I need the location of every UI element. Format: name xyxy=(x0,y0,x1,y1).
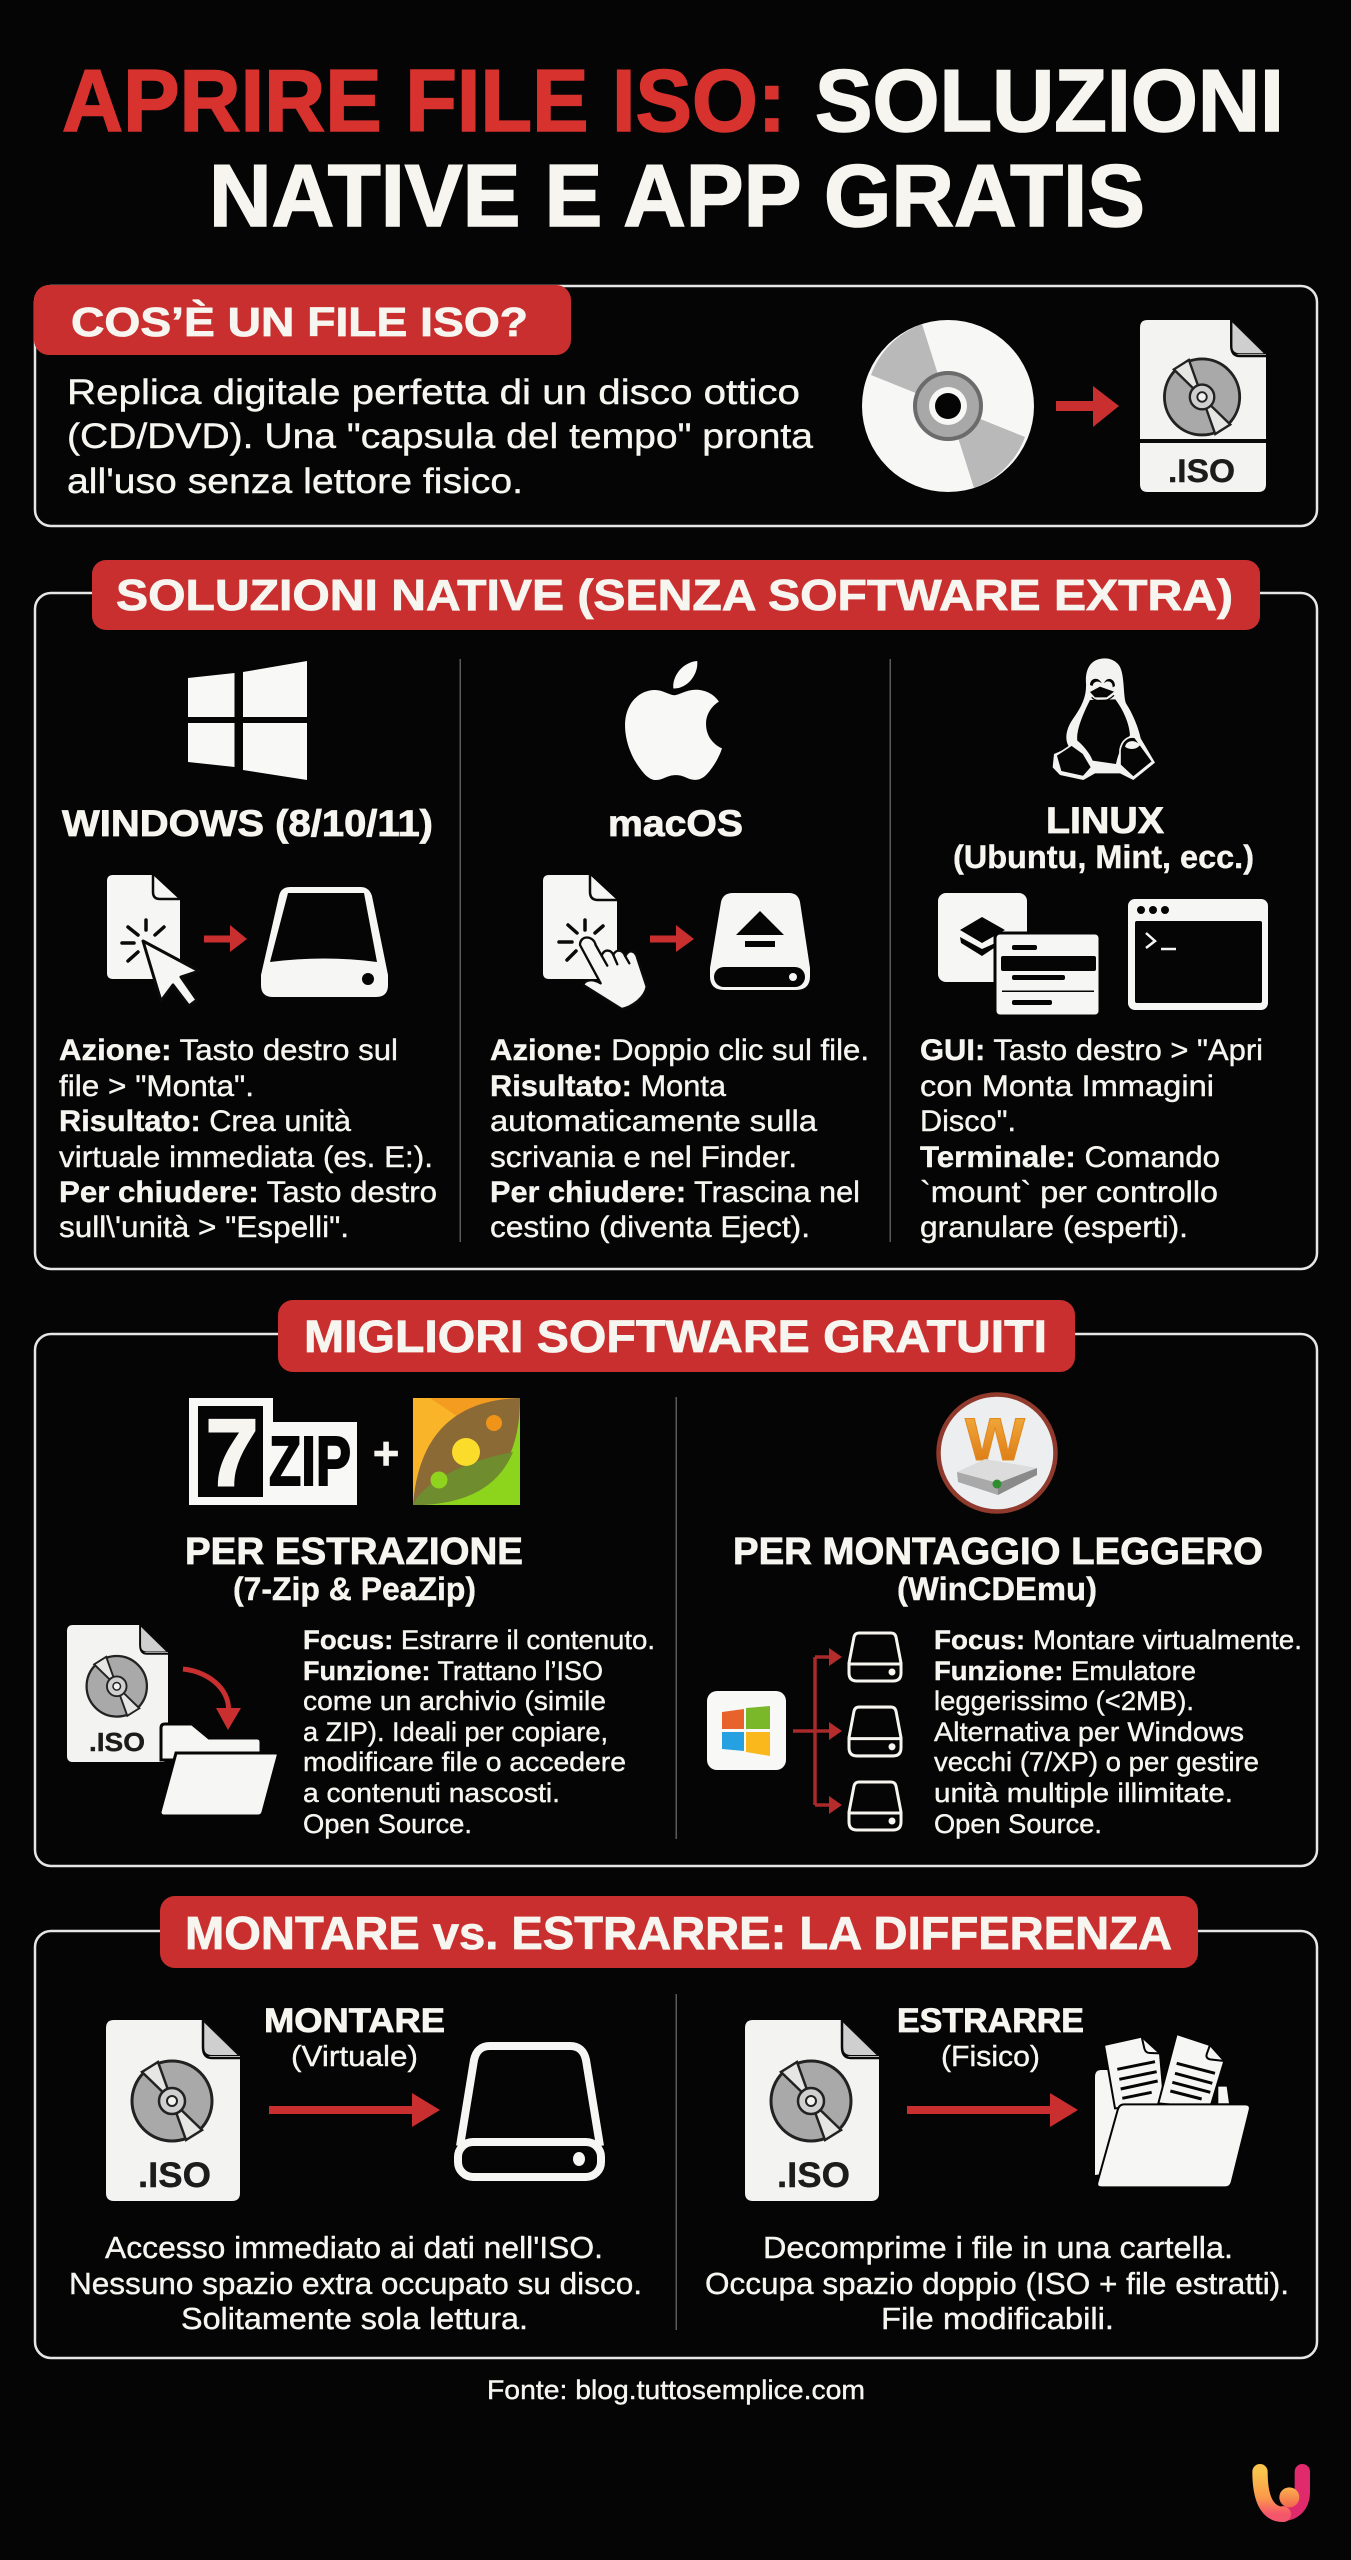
text: linux steps xyxy=(920,1034,1263,1244)
text: macOS steps: automaticamente sulla xyxy=(490,1105,817,1138)
title: SOLUZIONI xyxy=(815,51,1284,150)
text: linux steps: con Monta Immagini xyxy=(920,1070,1214,1103)
column: per montaggio leggero xyxy=(707,1394,1302,1839)
icon: drive outline xyxy=(458,2046,601,2177)
text: estrazione description: modificare file o accedere xyxy=(303,1747,626,1777)
text: estrarre description: Decomprime i file in una cartella. xyxy=(763,2230,1233,2265)
heading: per estrazione: PER ESTRAZIONE xyxy=(185,1531,523,1573)
icon: ISO file: .ISO xyxy=(1168,453,1235,489)
arrow: disc to file xyxy=(1056,386,1119,427)
source credit: Fonte: blog.tuttosemplice.com xyxy=(487,2375,865,2405)
text: macOS steps: Azione: Doppio clic sul file. xyxy=(490,1034,869,1067)
heading: montare xyxy=(264,2002,445,2073)
heading: per montaggio leggero: PER MONTAGGIO LEGGERO xyxy=(733,1531,1263,1573)
text: windows steps: sull\'unità > "Espelli". xyxy=(59,1211,349,1244)
text: estrazione description: a ZIP). Ideali per copiare, xyxy=(303,1717,608,1747)
text: estrarre description xyxy=(705,2230,1289,2336)
text: montaggio description: Funzione: Emulatore xyxy=(934,1656,1196,1686)
panel: montare vs estrarre xyxy=(35,1896,1317,2358)
icon: tux penguin xyxy=(1053,658,1155,780)
icon: ISO file xyxy=(106,2020,240,2201)
panel: migliori software gratuiti xyxy=(35,1300,1317,1866)
text: windows steps: virtuale immediata (es. E:). xyxy=(59,1141,433,1174)
text: estrarre description: File modificabili. xyxy=(881,2301,1114,2336)
column: macOS xyxy=(490,661,869,1244)
icon: windows tile with multiple drives xyxy=(707,1633,901,1830)
heading: migliori software gratuiti: MIGLIORI SOFTWARE GRATUITI xyxy=(304,1311,1047,1362)
text: windows steps: Per chiudere: Tasto destro xyxy=(59,1176,437,1209)
heading: per estrazione xyxy=(185,1531,523,1607)
text: linux steps: `mount` per controllo xyxy=(920,1176,1218,1209)
heading: macOS: macOS xyxy=(608,803,743,844)
text: montaggio description: vecchi (7/XP) o per gestire xyxy=(934,1747,1259,1777)
text: windows steps xyxy=(59,1034,437,1244)
icon: ISO file extracting to folder: .ISO xyxy=(89,1727,145,1757)
title: NATIVE E APP GRATIS xyxy=(209,146,1145,245)
text: montaggio description: Alternativa per Windows xyxy=(934,1717,1244,1747)
text: macOS steps: Risultato: Monta xyxy=(490,1070,726,1103)
title: APRIRE FILE ISO: xyxy=(62,51,786,150)
panel: soluzioni native xyxy=(35,560,1317,1269)
text: montaggio description xyxy=(934,1625,1302,1839)
text: estrazione description: come un archivio (simile xyxy=(303,1686,606,1716)
column: estrarre xyxy=(705,2002,1289,2336)
text: definition xyxy=(67,373,814,501)
icon: gui disk image window xyxy=(938,893,1100,1016)
heading: estrarre: ESTRARRE xyxy=(897,2002,1084,2040)
text: montare description: Solitamente sola lettura. xyxy=(181,2301,528,2336)
column: windows xyxy=(59,661,437,1244)
text: montare description: Nessuno spazio extra occupato su disco. xyxy=(69,2266,642,2301)
text: macOS steps: cestino (diventa Eject). xyxy=(490,1211,810,1244)
text: linux steps: Terminale: Comando xyxy=(920,1141,1220,1174)
text: definition: Replica digitale perfetta di un disco ottico xyxy=(67,373,800,412)
icon: 7-Zip logo xyxy=(189,1398,357,1505)
text: linux steps: granulare (esperti). xyxy=(920,1211,1188,1244)
text: estrazione description: a contenuti nascosti. xyxy=(303,1778,560,1808)
icon: 7-Zip logo: ZIP xyxy=(269,1422,351,1500)
icon: folder with documents xyxy=(1095,2034,1250,2187)
heading: cos'è un file ISO xyxy=(34,285,571,355)
text: estrarre description: Occupa spazio doppio (ISO + file estratti). xyxy=(705,2266,1289,2301)
heading: montare vs estrarre xyxy=(160,1896,1198,1968)
text: estrazione description: Open Source. xyxy=(303,1809,472,1839)
heading: linux xyxy=(953,800,1254,875)
heading: montare vs estrarre: MONTARE vs. ESTRARRE: LA DIFFERENZA xyxy=(185,1907,1172,1959)
text: macOS steps xyxy=(490,1034,869,1244)
text: montaggio description: Open Source. xyxy=(934,1809,1102,1839)
icon: ISO file xyxy=(1140,320,1266,492)
heading: per estrazione: (7-Zip & PeaZip) xyxy=(233,1571,476,1607)
icon: 7-Zip logo: 7 xyxy=(206,1400,258,1505)
arrow xyxy=(650,925,694,952)
icon: ISO file: .ISO xyxy=(777,2156,850,2195)
column: linux xyxy=(920,658,1268,1244)
text: montaggio description: leggerissimo (<2MB). xyxy=(934,1686,1194,1716)
column: per estrazione xyxy=(67,1398,655,1839)
text: estrazione description: Funzione: Trattano l’ISO xyxy=(303,1656,603,1686)
text: macOS steps: Per chiudere: Trascina nel xyxy=(490,1176,860,1209)
icon: WinCDEmu logo: W xyxy=(965,1406,1025,1473)
icon: eject drive xyxy=(710,893,810,990)
text: estrazione description xyxy=(303,1625,655,1839)
arrow xyxy=(204,925,247,952)
icon: ISO file xyxy=(745,2020,879,2201)
heading: per montaggio leggero xyxy=(733,1531,1263,1607)
text: definition: (CD/DVD). Una "capsula del tempo" pronta xyxy=(67,417,814,456)
heading: linux: (Ubuntu, Mint, ecc.) xyxy=(953,839,1254,875)
heading: windows: WINDOWS (8/10/11) xyxy=(62,803,433,844)
heading: montare: MONTARE xyxy=(264,2002,445,2040)
arrow: montare xyxy=(269,2093,440,2127)
icon: file with tapping hand xyxy=(543,875,647,1009)
text: montaggio description: unità multiple illimitate. xyxy=(934,1778,1233,1808)
icon: file with click cursor xyxy=(107,875,199,1006)
column: montare xyxy=(69,2002,642,2336)
icon: apple logo xyxy=(625,661,722,780)
panel: cos'è un file ISO xyxy=(34,285,1317,526)
text: definition: all'uso senza lettore fisico. xyxy=(67,462,523,501)
icon: virtual drive xyxy=(261,887,388,997)
text: macOS steps: scrivania e nel Finder. xyxy=(490,1141,797,1174)
text: montaggio description: Focus: Montare virtualmente. xyxy=(934,1625,1302,1655)
text: windows steps: Azione: Tasto destro sul xyxy=(59,1034,398,1067)
text: estrazione description: Focus: Estrarre il contenuto. xyxy=(303,1625,655,1655)
heading: linux: LINUX xyxy=(1046,800,1164,841)
heading: soluzioni native: SOLUZIONI NATIVE (SENZA SOFTWARE EXTRA) xyxy=(116,571,1233,620)
text: windows steps: file > "Monta". xyxy=(59,1070,254,1103)
heading: estrarre: (Fisico) xyxy=(941,2041,1040,2073)
icon: brand logo xyxy=(1260,2472,1302,2514)
title xyxy=(62,51,1284,245)
heading: migliori software gratuiti xyxy=(278,1300,1075,1372)
icon: PeaZip logo xyxy=(413,1398,520,1505)
icon: windows logo xyxy=(188,661,307,780)
heading: cos'è un file ISO: COS’È UN FILE ISO? xyxy=(71,299,528,345)
text: linux steps: GUI: Tasto destro > "Apri xyxy=(920,1034,1263,1067)
icon: terminal window xyxy=(1128,899,1268,1010)
text: montare description xyxy=(69,2230,642,2336)
arrow: estrarre xyxy=(907,2093,1078,2127)
icon: WinCDEmu logo xyxy=(938,1394,1056,1512)
icon: optical disc xyxy=(862,320,1034,492)
plus sign: + xyxy=(373,1427,399,1479)
icon: ISO file: .ISO xyxy=(138,2156,211,2195)
text: montare description: Accesso immediato ai dati nell'ISO. xyxy=(105,2230,603,2265)
icon: ISO file extracting to folder xyxy=(67,1625,278,1816)
heading: soluzioni native xyxy=(92,560,1260,630)
heading: montare: (Virtuale) xyxy=(291,2041,418,2073)
text: windows steps: Risultato: Crea unità xyxy=(59,1105,351,1138)
heading: per montaggio leggero: (WinCDEmu) xyxy=(897,1571,1097,1607)
text: linux steps: Disco". xyxy=(920,1105,1016,1138)
heading: estrarre xyxy=(897,2002,1084,2073)
